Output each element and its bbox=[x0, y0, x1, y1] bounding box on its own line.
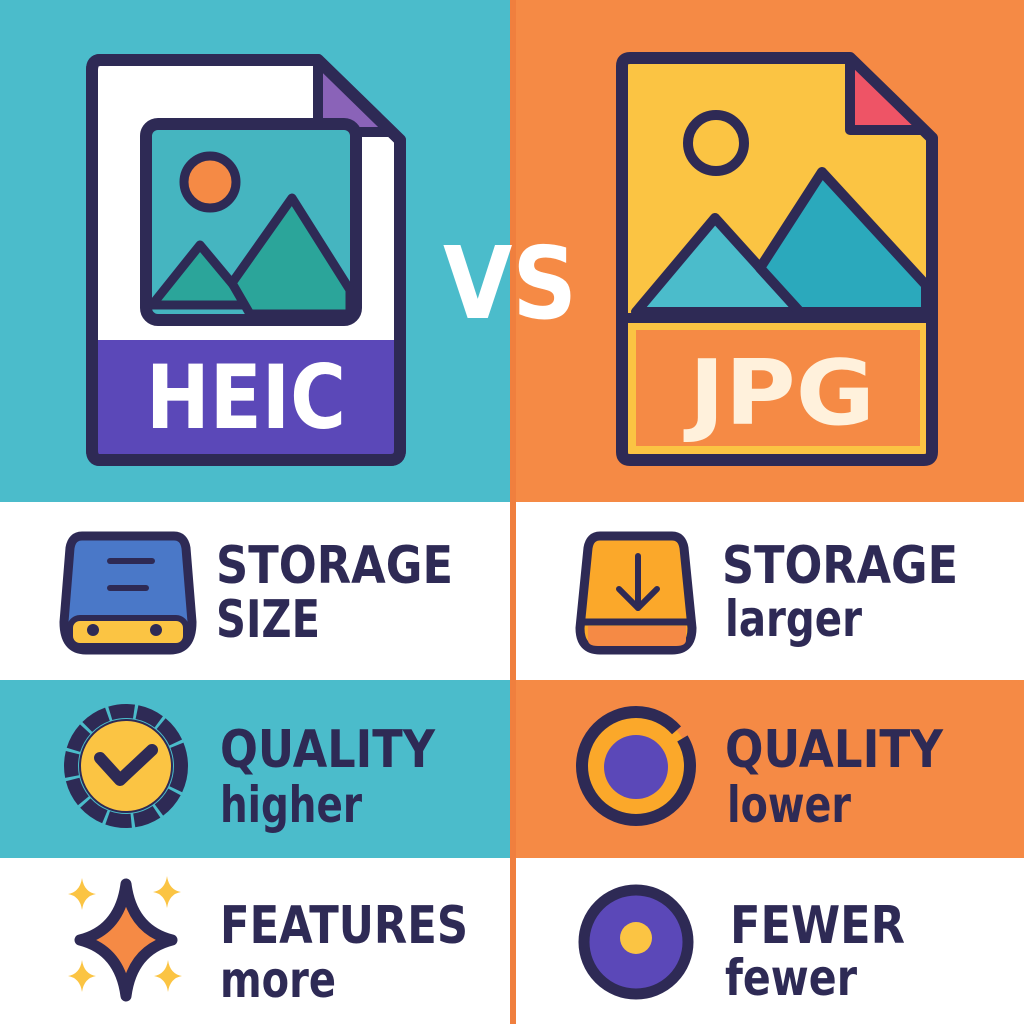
icon: sparkles bbox=[68, 876, 182, 996]
text: quality higher: higher bbox=[220, 776, 362, 834]
panel: quality row right bbox=[512, 680, 1024, 858]
icon: JPG storage drive bbox=[580, 536, 692, 650]
text: quality lower: QUALITY bbox=[725, 720, 944, 780]
text: storage size: SIZE bbox=[216, 590, 320, 650]
text: quality higher: QUALITY bbox=[220, 720, 436, 780]
title: VS: VS bbox=[443, 225, 577, 342]
text: storage size bbox=[216, 536, 453, 650]
text: storage larger: larger bbox=[725, 590, 862, 648]
text: fewer bbox=[725, 896, 905, 1007]
icon: HEIC file bbox=[92, 60, 400, 460]
text: quality lower: lower bbox=[727, 776, 851, 834]
panel: JPG top background bbox=[512, 0, 1024, 502]
icon: quality low circle bbox=[582, 712, 690, 820]
text: features more: more bbox=[220, 951, 336, 1009]
panel: quality row left bbox=[0, 680, 512, 858]
text: quality higher bbox=[220, 720, 436, 834]
text: quality lower bbox=[725, 720, 944, 834]
text: fewer: fewer bbox=[725, 949, 857, 1007]
text: storage larger bbox=[722, 536, 958, 648]
text: features more bbox=[220, 896, 468, 1009]
label: JPG: JPG bbox=[683, 341, 875, 446]
text: storage size: STORAGE bbox=[216, 536, 453, 596]
text: fewer: FEWER bbox=[730, 896, 905, 956]
icon: JPG file bbox=[622, 58, 932, 460]
icon: HEIC storage drive bbox=[64, 536, 192, 650]
text: features more: FEATURES bbox=[220, 896, 468, 956]
icon: quality check badge bbox=[71, 711, 181, 821]
icon: fewer circle bbox=[584, 890, 688, 994]
label: HEIC: HEIC bbox=[146, 346, 346, 449]
text: storage larger: STORAGE bbox=[722, 536, 958, 596]
panel: HEIC top background bbox=[0, 0, 512, 502]
